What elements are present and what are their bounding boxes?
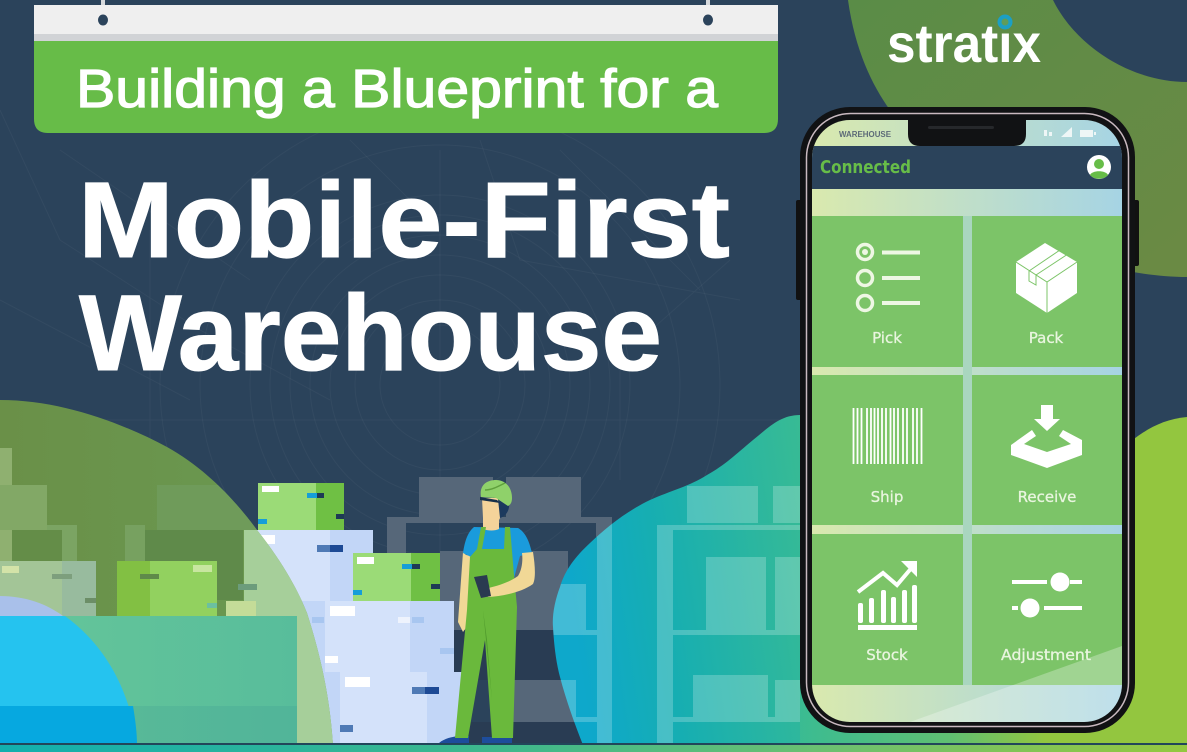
sign text: Building a Blueprint for a	[76, 59, 719, 119]
main title	[78, 159, 730, 393]
hanging sign header	[34, 0, 778, 133]
shoes	[439, 736, 512, 743]
green arch with translucent boxes	[0, 400, 344, 745]
tile: Adjustment	[1001, 572, 1091, 664]
phone body	[800, 107, 1135, 733]
handheld device	[474, 575, 491, 598]
hanging strings	[103, 0, 708, 18]
main title: Warehouse	[79, 272, 662, 393]
teal blob with shelving	[540, 415, 800, 745]
stratix logo: stratix	[887, 14, 1041, 74]
box: top green	[258, 483, 344, 530]
tile: Ship	[854, 408, 922, 506]
worker figure	[439, 480, 535, 743]
overalls	[455, 527, 517, 738]
green sign panel	[34, 41, 778, 133]
color band behind the phone base	[790, 680, 1110, 745]
screen	[812, 120, 1122, 722]
blue shirt	[463, 527, 532, 585]
tile: Stock: Stock	[866, 646, 908, 664]
tile: Pack	[1016, 243, 1077, 347]
box: middle green	[353, 553, 440, 601]
white bar	[34, 5, 778, 35]
hair	[498, 499, 509, 518]
right arm	[484, 552, 535, 597]
left arm	[458, 552, 472, 632]
blueprint line pattern	[0, 105, 800, 665]
tile: Stock	[858, 561, 917, 664]
box: bottom blue	[310, 672, 462, 745]
helmet	[481, 480, 512, 506]
notch	[908, 120, 1026, 146]
side buttons	[796, 200, 802, 300]
connected status: Connected	[820, 157, 911, 178]
top right green blob	[848, 0, 1187, 277]
blue semicircle	[0, 596, 137, 745]
tile: Receive: Receive	[1018, 488, 1076, 506]
background shelving silhouette	[387, 477, 612, 745]
tiles	[812, 216, 1122, 685]
box: upper blue	[244, 530, 373, 620]
tile: Pack: Pack	[1029, 329, 1064, 347]
tile: Pick	[858, 244, 920, 347]
stacked boxes	[244, 483, 462, 745]
bottom strip	[0, 743, 1187, 752]
box: middle blue	[300, 601, 454, 672]
tile: Receive	[1011, 405, 1082, 506]
tile: Adjustment: Adjustment	[1001, 646, 1091, 664]
tile: Ship: Ship	[871, 488, 903, 506]
main title: Mobile-First	[78, 159, 730, 280]
warehouse tab label: WAREHOUSE	[839, 130, 892, 139]
smartphone	[796, 107, 1139, 733]
status icons	[1044, 127, 1096, 137]
avatar icon	[1087, 155, 1111, 179]
tile: Pick: Pick	[872, 329, 902, 347]
peg holes	[98, 14, 108, 26]
neck and face	[482, 498, 502, 530]
bottom right green blob	[1100, 417, 1187, 745]
